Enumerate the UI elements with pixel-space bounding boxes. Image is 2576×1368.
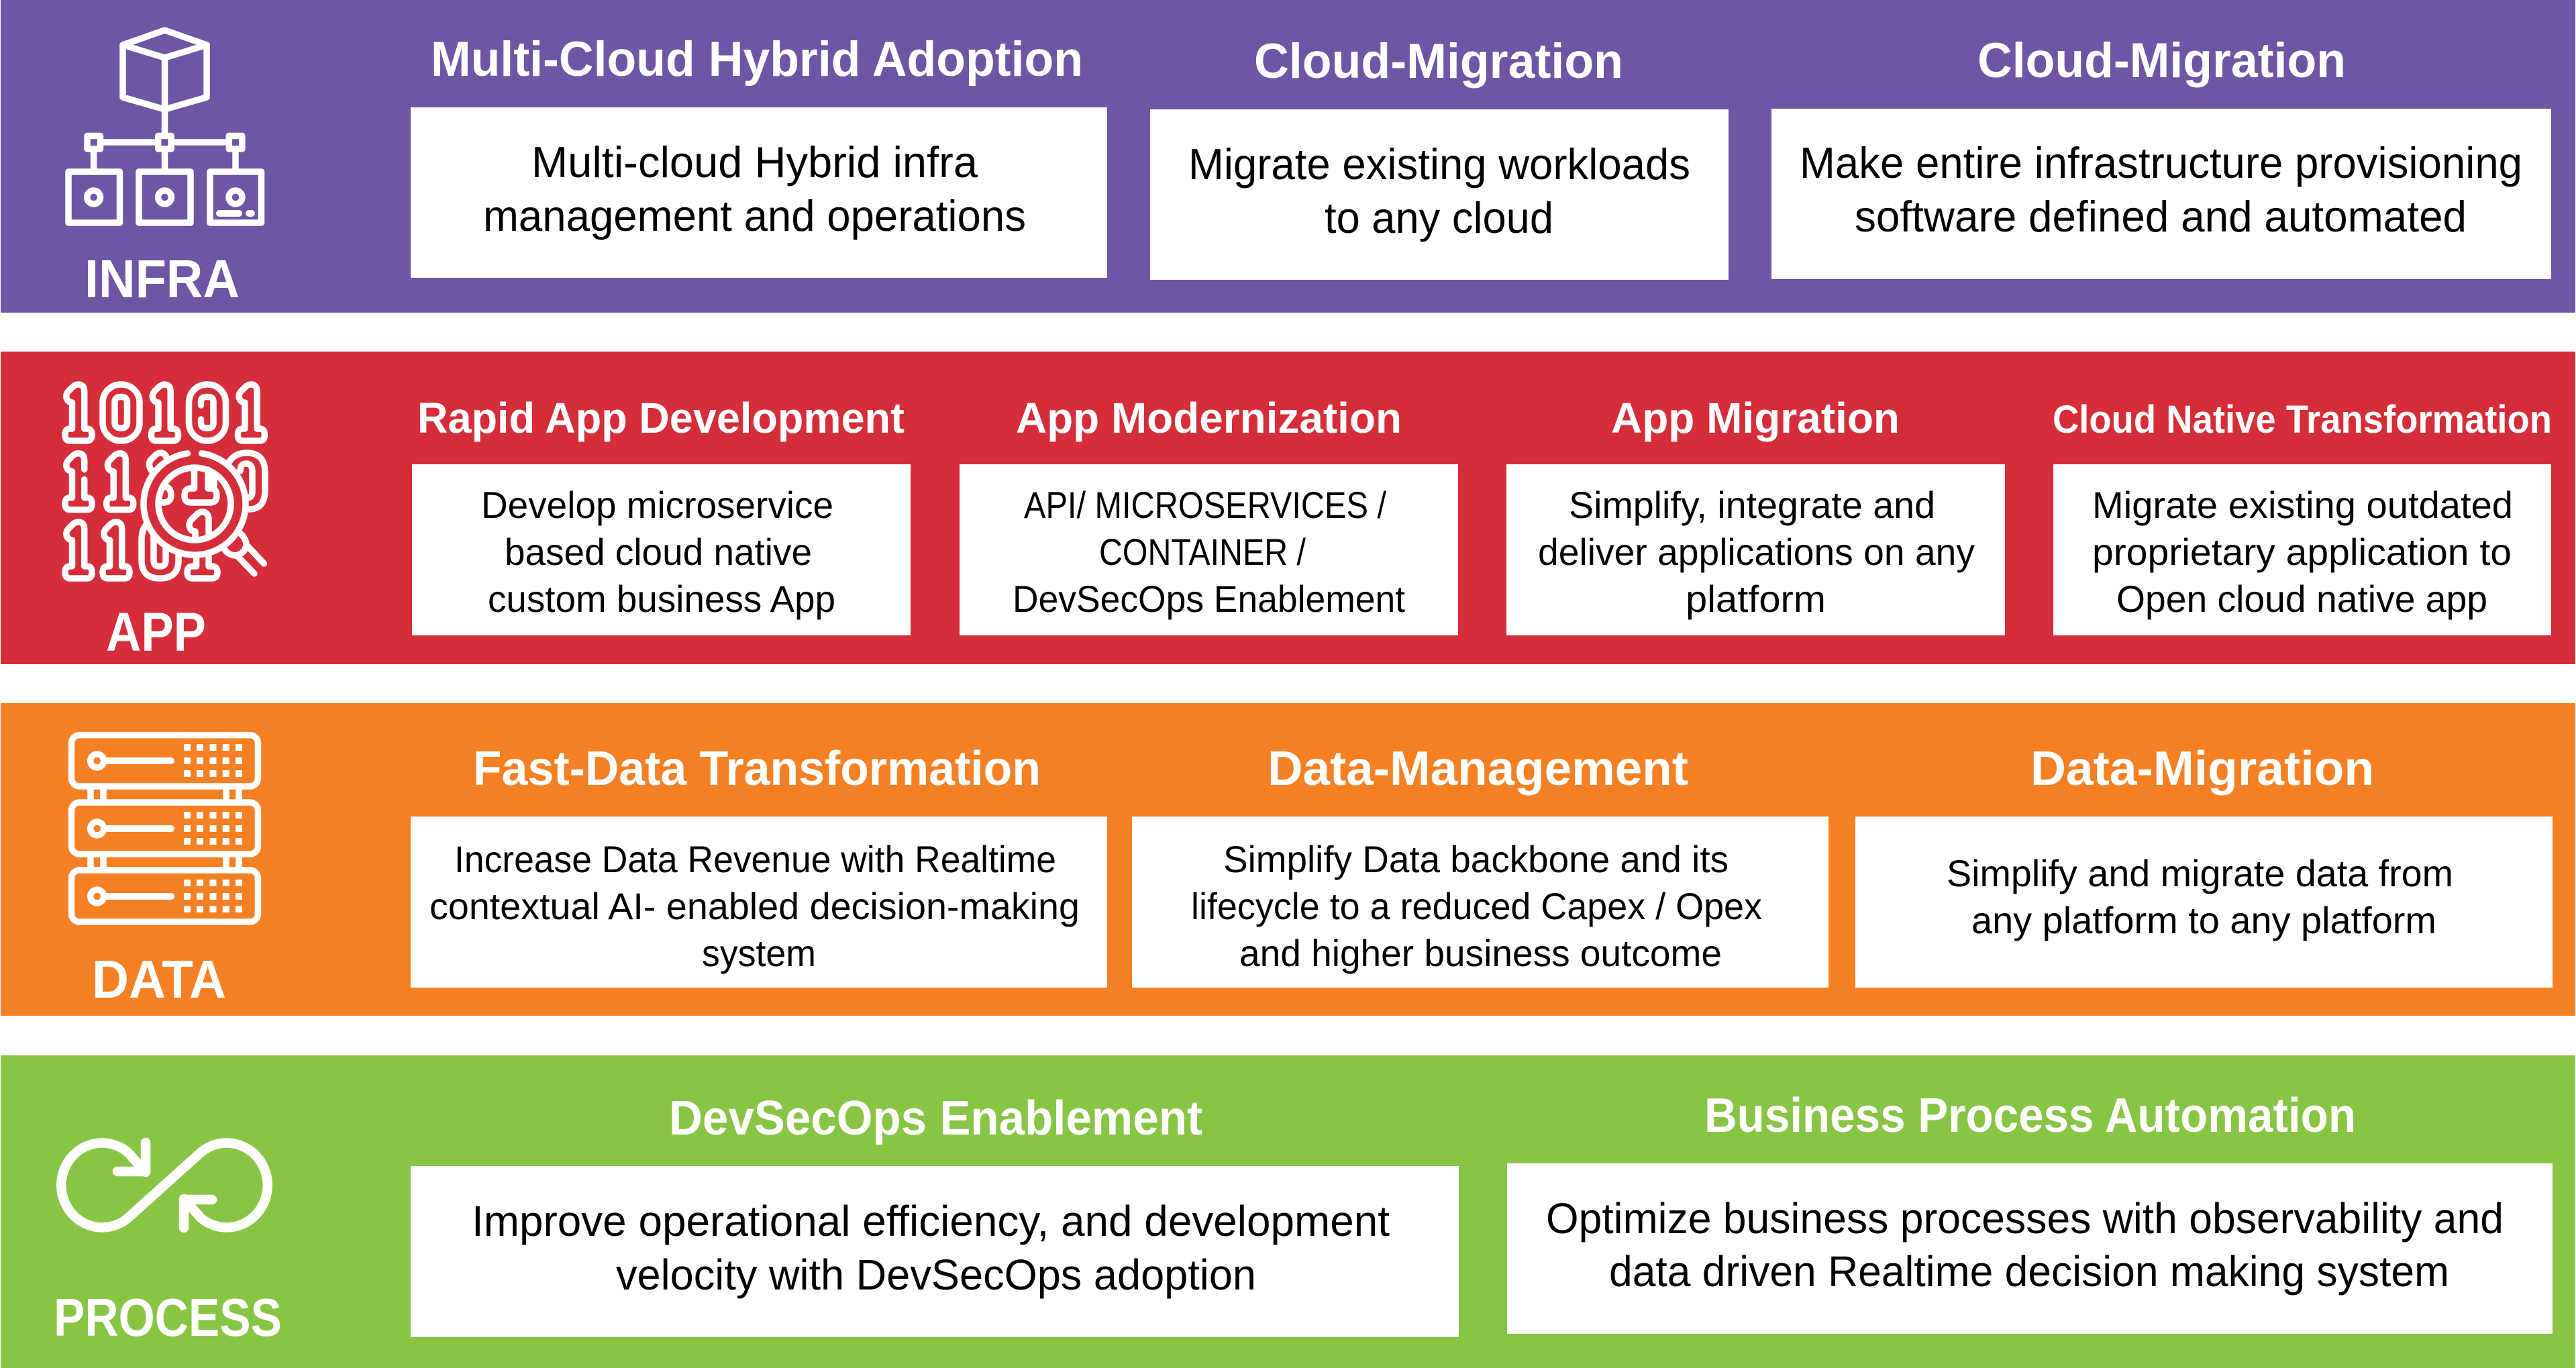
card: business process automation	[1507, 1089, 2553, 1334]
card: multi-cloud hybrid adoption: Multi-cloud Hybrid infra	[531, 138, 978, 187]
card: rapid app development: Rapid App Development	[417, 394, 905, 442]
card: fast-data transformation: contextual AI- enabled decision-making	[429, 885, 1080, 927]
card: data-migration: Simplify and migrate data from	[1947, 852, 2453, 894]
card: rapid app development: custom business App	[488, 578, 835, 620]
card: cloud migration provisioning	[1771, 34, 2551, 279]
icon: infinity loop arrows	[61, 1143, 268, 1228]
card: app modernization: API/ MICROSERVICES /	[1024, 484, 1386, 526]
card: multi-cloud hybrid adoption: management and operations	[483, 191, 1026, 240]
card: data-management: Data-Management	[1268, 742, 1688, 796]
card: devsecops enablement: DevSecOps Enablement	[669, 1092, 1202, 1145]
card: fast-data transformation: Fast-Data Transformation	[473, 742, 1041, 796]
card: business process automation: data driven Realtime decision making system	[1609, 1247, 2449, 1296]
card: fast-data transformation: system	[702, 932, 816, 974]
card: data-management: and higher business outcome	[1239, 932, 1722, 974]
card: data-management: Simplify Data backbone and its	[1223, 838, 1729, 880]
icon: server rack	[71, 735, 258, 922]
card: devsecops enablement: velocity with DevSecOps adoption	[616, 1251, 1256, 1299]
card: rapid app development	[412, 394, 911, 635]
icon: binary digits under magnifier	[65, 384, 265, 578]
card: multi-cloud hybrid adoption	[411, 32, 1107, 278]
card: app modernization: App Modernization	[1016, 394, 1402, 442]
card: cloud native transformation: proprietary application to	[2092, 531, 2512, 573]
panel: process	[1, 1055, 2575, 1368]
label: PROCESS: PROCESS	[54, 1287, 282, 1347]
card: cloud migration provisioning: Make entire infrastructure provisioning	[1800, 138, 2522, 187]
card: fast-data transformation: Increase Data Revenue with Realtime	[454, 838, 1056, 880]
card: app migration: Simplify, integrate and	[1569, 484, 1935, 526]
card: cloud migration workloads	[1150, 34, 1729, 280]
card: app migration	[1506, 394, 2005, 635]
card: rapid app development: Develop microservice	[481, 484, 833, 526]
label: DATA: DATA	[92, 949, 226, 1009]
card: data-migration	[1855, 742, 2553, 988]
card: cloud migration workloads: Migrate existing workloads	[1188, 140, 1690, 189]
card: rapid app development: based cloud native	[505, 531, 812, 573]
card: cloud migration workloads: Cloud-Migration	[1254, 34, 1623, 89]
icon: cube network	[68, 30, 262, 223]
card: data-management	[1132, 742, 1828, 988]
card: cloud native transformation: Open cloud native app	[2116, 578, 2487, 620]
card: cloud migration provisioning: Cloud-Migration	[1977, 34, 2346, 88]
card: devsecops enablement: Improve operational efficiency, and development	[472, 1197, 1390, 1245]
card: multi-cloud hybrid adoption: Multi-Cloud Hybrid Adoption	[431, 32, 1083, 87]
card: app migration: App Migration	[1611, 394, 1900, 442]
card: data-migration: Data-Migration	[2030, 742, 2374, 796]
card: app migration: deliver applications on any	[1538, 531, 1975, 573]
card: cloud native transformation	[2053, 398, 2552, 635]
label: INFRA: INFRA	[85, 249, 240, 309]
panel: infra	[1, 0, 2575, 313]
card: cloud migration workloads: to any cloud	[1325, 193, 1553, 242]
card: devsecops enablement	[411, 1092, 1459, 1337]
card: app migration: platform	[1686, 578, 1826, 620]
panel: data	[1, 703, 2575, 1016]
card: business process automation: Business Process Automation	[1704, 1089, 2356, 1143]
panel: app	[1, 352, 2575, 664]
card: app modernization: DevSecOps Enablement	[1013, 578, 1405, 620]
card: cloud native transformation: Cloud Native Transformation	[2053, 398, 2552, 441]
label: APP: APP	[106, 602, 206, 663]
card: cloud native transformation: Migrate existing outdated	[2092, 484, 2513, 526]
card: data-migration: any platform to any platform	[1971, 899, 2436, 941]
card: fast-data transformation	[411, 742, 1107, 988]
card: app modernization	[960, 394, 1458, 635]
card: business process automation: Optimize business processes with observability and	[1546, 1194, 2504, 1243]
card: app modernization: CONTAINER /	[1099, 531, 1306, 573]
card: data-management: lifecycle to a reduced Capex / Opex	[1191, 885, 1762, 927]
card: cloud migration provisioning: software defined and automated	[1855, 192, 2467, 241]
